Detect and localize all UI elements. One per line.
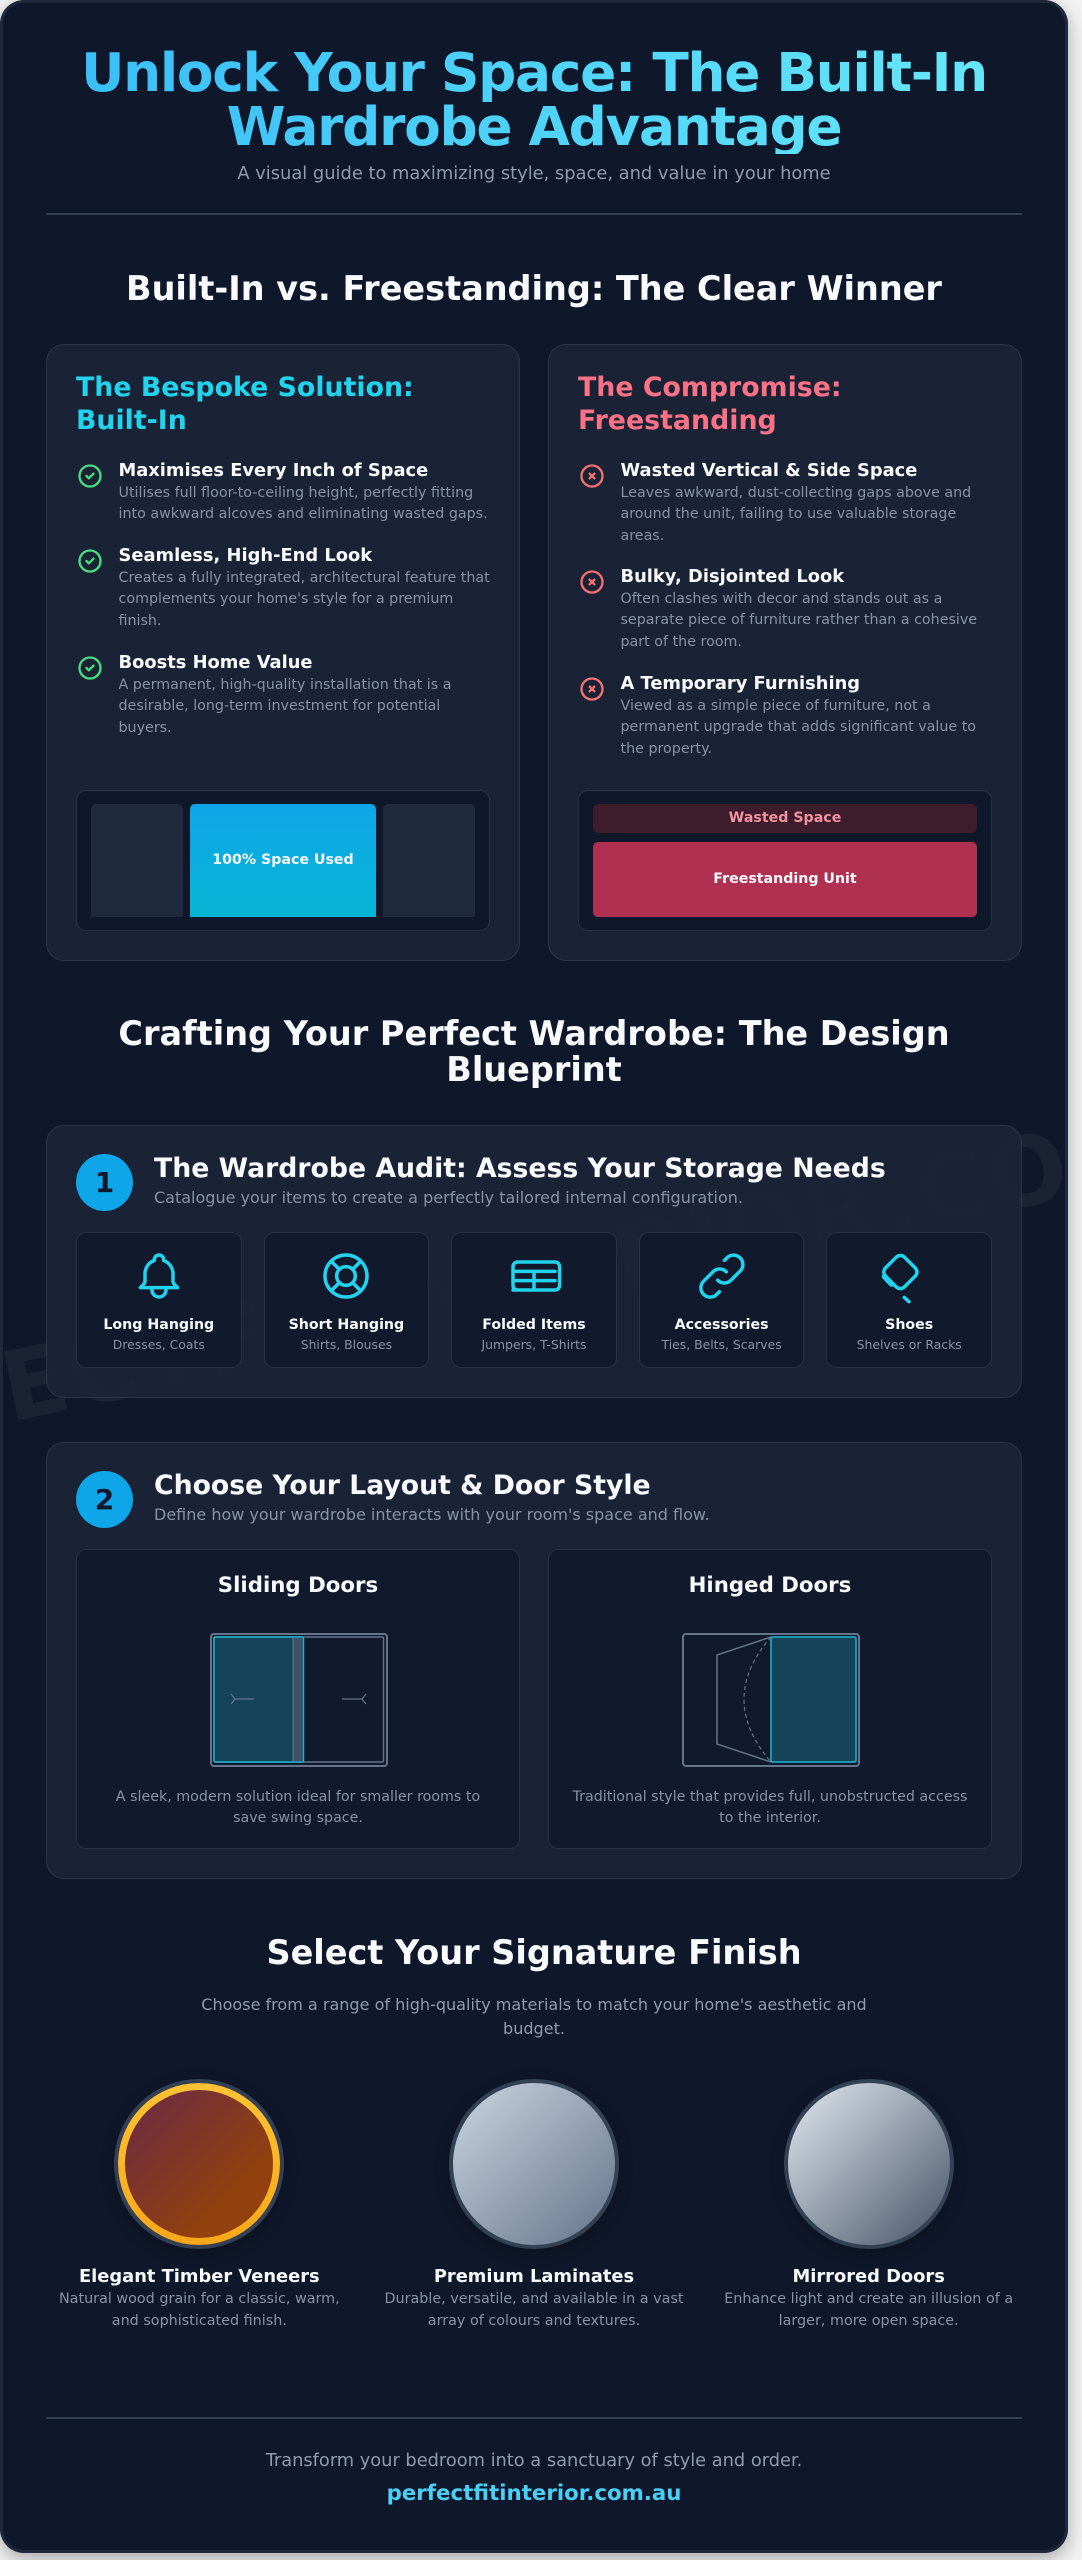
option title: Sliding Doors bbox=[218, 1573, 378, 1598]
title: Unlock Your Space: The Built-In bbox=[81, 41, 987, 104]
tile text: Dresses, Coats bbox=[113, 1337, 205, 1352]
benefit text bbox=[118, 484, 488, 522]
subtitle: A visual guide to maximizing style, space, and value in your home bbox=[237, 163, 831, 184]
icon: lifebuoy bbox=[323, 1253, 369, 1299]
panel heading: built-in: The Bespoke Solution: bbox=[76, 372, 414, 403]
icon: bell bbox=[138, 1253, 180, 1299]
tile: short hanging bbox=[264, 1232, 429, 1368]
drawback text bbox=[620, 698, 976, 757]
drawback: temporary furnishing bbox=[580, 673, 976, 757]
option text: save swing space. bbox=[233, 1810, 363, 1826]
panel heading: freestanding bbox=[578, 372, 842, 436]
step number 2 bbox=[76, 1471, 133, 1528]
built-in unit: 100% Space Used bbox=[212, 852, 354, 868]
tile: folded items bbox=[451, 1232, 617, 1368]
section heading: finishes: Select Your Signature Finish bbox=[266, 1933, 802, 1972]
wasted space bar: Wasted Space bbox=[729, 810, 841, 826]
swatch: mirror bbox=[784, 2079, 954, 2249]
diagram: built-in space use bbox=[76, 790, 490, 931]
tile text: Ties, Belts, Scarves bbox=[662, 1337, 782, 1352]
finishes intro text: budget. bbox=[503, 2019, 565, 2038]
tile title: Short Hanging bbox=[289, 1317, 404, 1333]
diagram: freestanding space use bbox=[578, 790, 992, 931]
finish title: Premium Laminates bbox=[434, 2266, 634, 2287]
tile title: Accessories bbox=[675, 1317, 769, 1333]
tile title: Long Hanging bbox=[103, 1317, 214, 1333]
option text: A sleek, modern solution ideal for smaller rooms to bbox=[116, 1788, 480, 1804]
benefit text: A permanent, high-quality installation that is a bbox=[118, 676, 451, 692]
finish text: larger, more open space. bbox=[779, 2312, 959, 2328]
benefit: seamless look bbox=[78, 545, 490, 629]
finish title: Elegant Timber Veneers bbox=[79, 2266, 320, 2287]
drawback text: permanent upgrade that adds significant value to bbox=[620, 719, 976, 735]
tile title: Folded Items bbox=[482, 1317, 586, 1333]
icon: table bbox=[511, 1260, 562, 1292]
drawback text: areas. bbox=[620, 528, 664, 544]
drawback title: A Temporary Furnishing bbox=[620, 673, 860, 694]
step number 2: 2 bbox=[95, 1483, 114, 1516]
drawback text: Viewed as a simple piece of furniture, not a bbox=[620, 698, 931, 714]
diagram: hinged doors bbox=[682, 1633, 860, 1767]
step 1 subtitle: Catalogue your items to create a perfectly tailored internal configuration. bbox=[154, 1188, 743, 1207]
step number 1: 1 bbox=[95, 1166, 114, 1199]
drawback: bulky look bbox=[580, 566, 977, 650]
benefit title: Boosts Home Value bbox=[118, 652, 312, 673]
freestanding unit bbox=[593, 842, 977, 917]
icon: cross bbox=[580, 464, 604, 488]
footer website: perfectfitinterior.com.au bbox=[387, 2481, 681, 2506]
option: hinged doors bbox=[548, 1549, 992, 1849]
benefit text bbox=[118, 676, 451, 736]
option title: Hinged Doors bbox=[689, 1573, 851, 1598]
icon: link bbox=[699, 1253, 745, 1299]
tile text: Shelves or Racks bbox=[857, 1337, 962, 1352]
footer bbox=[266, 2450, 802, 2506]
built-in unit bbox=[190, 804, 376, 916]
panel heading: built-in: Built-In bbox=[76, 405, 187, 436]
step number 1 bbox=[76, 1154, 133, 1211]
benefit text: Utilises full floor-to-ceiling height, perfectly fitting bbox=[118, 484, 473, 500]
finish text: array of colours and textures. bbox=[428, 2312, 640, 2328]
panel: freestanding bbox=[548, 344, 1022, 961]
benefit text: complements your home's style for a premium bbox=[118, 591, 453, 607]
tile: shoes bbox=[826, 1232, 992, 1368]
drawback: wasted space bbox=[580, 460, 971, 544]
panel heading: built-in bbox=[76, 372, 414, 436]
benefit text: buyers. bbox=[118, 720, 172, 736]
finish text bbox=[384, 2291, 684, 2328]
drawback text bbox=[620, 484, 971, 544]
left filler bbox=[91, 804, 183, 916]
tile text: Jumpers, T-Shirts bbox=[482, 1337, 586, 1352]
swatch: laminate bbox=[449, 2079, 619, 2249]
drawback text: part of the room. bbox=[620, 634, 742, 650]
drawback text: Leaves awkward, dust-collecting gaps above and bbox=[620, 484, 971, 500]
benefit: maximises space bbox=[78, 460, 488, 522]
drawback text bbox=[620, 590, 977, 650]
tile title: Shoes bbox=[885, 1317, 933, 1333]
drawback text: the property. bbox=[620, 741, 712, 757]
title: Wardrobe Advantage bbox=[227, 95, 841, 158]
finish title: Mirrored Doors bbox=[792, 2266, 945, 2287]
benefit text: into awkward alcoves and eliminating wasted gaps. bbox=[118, 506, 488, 522]
panel heading: freestanding: The Compromise: bbox=[578, 372, 842, 403]
panel: step 2 layout and door style bbox=[46, 1442, 1022, 1879]
finish text: Durable, versatile, and available in a vast bbox=[384, 2291, 684, 2307]
drawback title: Bulky, Disjointed Look bbox=[620, 566, 844, 587]
icon: cross bbox=[580, 570, 604, 594]
finish text: Natural wood grain for a classic, warm, bbox=[59, 2291, 340, 2307]
option text: Traditional style that provides full, unobstructed access bbox=[573, 1788, 967, 1804]
section heading: design blueprint bbox=[118, 1014, 950, 1089]
diagram: sliding doors bbox=[210, 1633, 388, 1767]
swatch: timber with gold ring bbox=[114, 2079, 284, 2249]
benefit text: finish. bbox=[118, 613, 162, 629]
finish text: Enhance light and create an illusion of a bbox=[724, 2291, 1013, 2307]
icon: check bbox=[78, 549, 102, 573]
section heading: comparison: Built-In vs. Freestanding: The Clear Winner bbox=[126, 269, 942, 308]
title bbox=[50, 46, 1018, 154]
finish text bbox=[724, 2291, 1013, 2328]
finish: laminates bbox=[384, 2079, 684, 2328]
step 2 subtitle: Define how your wardrobe interacts with your room's space and flow. bbox=[154, 1505, 710, 1524]
drawback title: Wasted Vertical & Side Space bbox=[620, 460, 917, 481]
panel: built-in bbox=[46, 344, 520, 961]
panel: step 1 wardrobe audit bbox=[46, 1125, 1022, 1398]
step 1 title: The Wardrobe Audit: Assess Your Storage Needs bbox=[154, 1153, 886, 1184]
option text bbox=[572, 1788, 967, 1826]
drawback text: separate piece of furniture rather than a cohesive bbox=[620, 612, 977, 628]
finish: timber veneers bbox=[59, 2079, 340, 2328]
option text bbox=[116, 1788, 480, 1826]
benefit: home value bbox=[78, 652, 451, 736]
footer tagline: Transform your bedroom into a sanctuary of style and order. bbox=[266, 2450, 802, 2471]
freestanding unit: Freestanding Unit bbox=[713, 871, 857, 887]
right filler bbox=[383, 804, 475, 916]
finish: mirrored doors bbox=[724, 2079, 1013, 2328]
option text: to the interior. bbox=[719, 1810, 821, 1826]
finishes intro text bbox=[201, 1995, 867, 2038]
tile text: Shirts, Blouses bbox=[301, 1337, 392, 1352]
icon: cross bbox=[580, 677, 604, 701]
icon: check bbox=[78, 656, 102, 680]
benefit title: Seamless, High-End Look bbox=[118, 545, 372, 566]
finish text: and sophisticated finish. bbox=[112, 2312, 287, 2328]
finish text bbox=[59, 2291, 340, 2328]
benefit text: desirable, long-term investment for potential bbox=[118, 698, 440, 714]
benefit title: Maximises Every Inch of Space bbox=[118, 460, 428, 481]
tile: accessories bbox=[639, 1232, 804, 1368]
drawback text: Often clashes with decor and stands out as a bbox=[620, 590, 942, 606]
benefit text: Creates a fully integrated, architectural feature that bbox=[118, 570, 490, 586]
header bbox=[81, 41, 987, 184]
section heading: design blueprint: Crafting Your Perfect Wardrobe: The Design bbox=[118, 1014, 950, 1053]
option: sliding doors bbox=[76, 1549, 520, 1849]
wasted space bar bbox=[593, 804, 977, 833]
icon: check bbox=[78, 464, 102, 488]
panel heading: freestanding: Freestanding bbox=[578, 405, 777, 436]
drawback text: around the unit, failing to use valuable storage bbox=[620, 506, 956, 522]
finishes intro text: Choose from a range of high-quality materials to match your home's aesthetic and bbox=[201, 1995, 867, 2014]
tile: long hanging bbox=[76, 1232, 242, 1368]
section heading: design blueprint: Blueprint bbox=[446, 1050, 622, 1089]
icon: shoes bbox=[882, 1254, 919, 1304]
step 2 title: Choose Your Layout & Door Style bbox=[154, 1470, 651, 1501]
benefit text bbox=[118, 570, 490, 629]
